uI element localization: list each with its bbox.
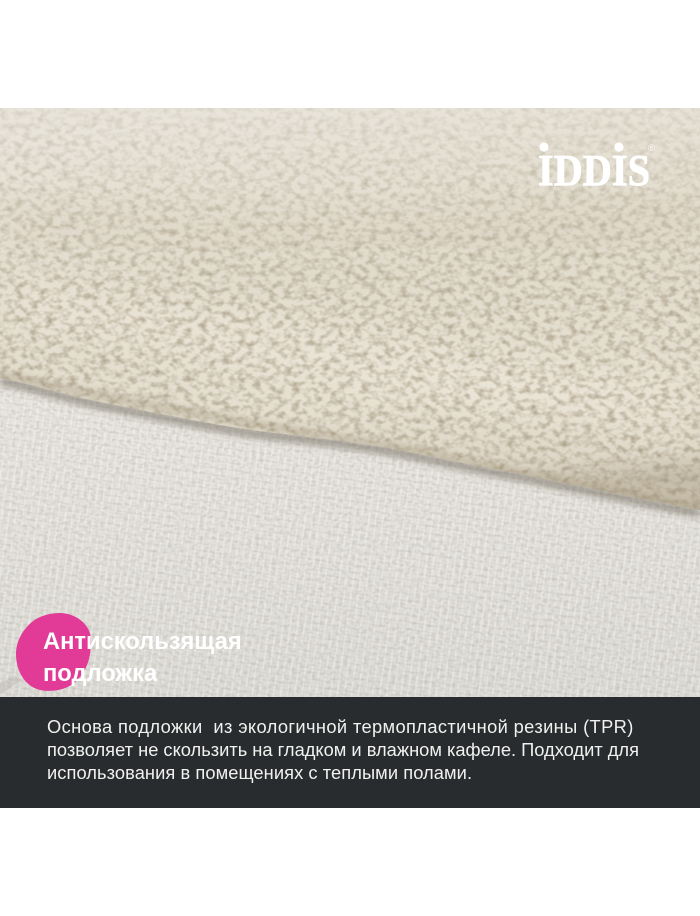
icon: pink blob behind heading xyxy=(16,613,91,691)
backing surface xyxy=(0,108,700,697)
panel: description band xyxy=(0,697,700,808)
text block: description: Основа подложки из экологичной термопластичной резины (TPR) xyxy=(47,716,634,737)
fringe of pile at lower left xyxy=(0,676,22,694)
logo: iddis: ® xyxy=(648,143,655,153)
heading: подложка xyxy=(43,661,157,687)
pile xyxy=(0,108,700,518)
photo: rolled-back bath mat showing pile and backing xyxy=(0,108,700,697)
heading xyxy=(43,629,242,687)
text block: description xyxy=(47,716,639,783)
heading: Антискользящая xyxy=(43,629,242,655)
text block: description: использования в помещениях с теплыми полами. xyxy=(47,762,472,783)
text block: description: позволяет не скользить на гладком и влажном кафеле. Подходит для xyxy=(47,739,639,760)
shadow under the rolled pile xyxy=(0,381,700,513)
